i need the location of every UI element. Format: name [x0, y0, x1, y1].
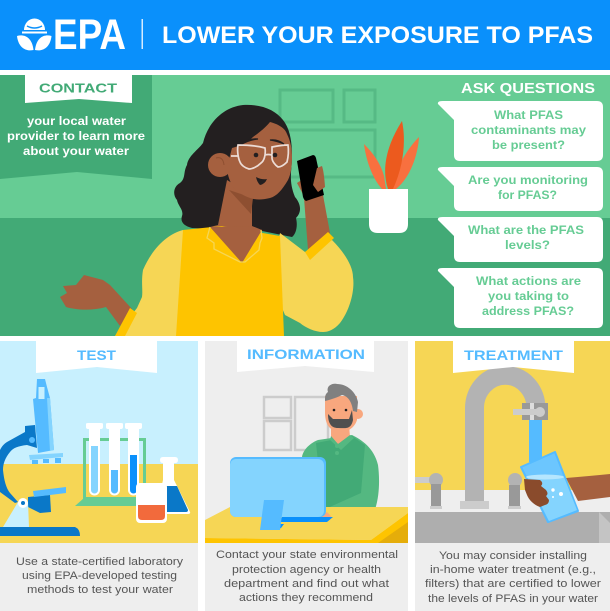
- question bubble 1: contaminants may: [471, 123, 586, 137]
- sink: [415, 512, 610, 543]
- face: [227, 122, 292, 200]
- treatment caption: filters) that are certified to lower: [425, 578, 601, 590]
- question bubble 2: for PFAS?: [498, 188, 557, 202]
- title: LOWER YOUR EXPOSURE TO PFAS: [162, 22, 593, 49]
- contact text: about your water: [23, 144, 129, 158]
- question bubble 1: What PFAS: [494, 108, 563, 122]
- eyebrows: [240, 139, 284, 145]
- information caption: [216, 549, 398, 604]
- arm: [566, 474, 610, 501]
- glass of water: [521, 452, 578, 522]
- icon: EPA logo flower: [17, 19, 52, 50]
- test tube rack: [75, 423, 152, 506]
- treatment caption: [425, 550, 601, 605]
- contact banner: [0, 75, 152, 179]
- left arm and hand: [60, 275, 132, 326]
- question bubble 4: you taking to: [488, 289, 569, 303]
- right arm: [304, 195, 330, 250]
- test caption: using EPA-developed testing: [22, 570, 177, 582]
- information ribbon: [237, 341, 374, 372]
- sleeves: [115, 230, 200, 336]
- question bubble 3: What are the PFAS: [468, 223, 584, 237]
- information caption: actions they recommend: [239, 592, 373, 604]
- panel: contact scene: [0, 75, 610, 336]
- wall windows: [264, 397, 328, 450]
- panel: test: [0, 341, 198, 611]
- woman: [60, 105, 353, 336]
- question bubble 4: [438, 268, 603, 328]
- cuffs: [305, 232, 334, 260]
- microscope: [0, 379, 80, 536]
- treatment caption: the levels of PFAS in your water: [428, 593, 598, 605]
- plant: [364, 121, 419, 233]
- question bubble 4: address PFAS?: [482, 304, 574, 318]
- test heading: TEST: [77, 347, 116, 363]
- wall frames: [280, 90, 375, 177]
- faucet: [460, 375, 548, 509]
- faucet handles: [415, 473, 522, 509]
- water stream: [529, 420, 542, 462]
- treatment caption: in-home water treatment (e.g.,: [430, 564, 596, 576]
- information heading: INFORMATION: [247, 346, 365, 362]
- test caption: methods to test your water: [27, 584, 173, 596]
- panel: information: [205, 341, 408, 611]
- information caption: Contact your state environmental: [216, 549, 398, 561]
- neck: [210, 180, 262, 262]
- treatment heading: TREATMENT: [464, 347, 564, 363]
- contact text: your local water: [27, 114, 126, 128]
- contact text: provider to learn more: [7, 129, 145, 143]
- vest: [176, 226, 284, 336]
- question bubble 4: What actions are: [476, 274, 581, 288]
- treatment caption: You may consider installing: [439, 550, 587, 562]
- phone fingers: [313, 166, 325, 192]
- glasses: [231, 145, 288, 169]
- beaker: [136, 483, 167, 523]
- test caption: Use a state-certified laboratory: [16, 556, 184, 568]
- EPA wordmark: EPA: [53, 11, 126, 59]
- question bubble 1: be present?: [492, 138, 565, 152]
- question bubble 2: Are you monitoring: [468, 173, 588, 187]
- keyboard and hand: [276, 512, 333, 530]
- contact heading: CONTACT: [39, 80, 117, 96]
- question bubble 3: [438, 217, 603, 262]
- header band: [0, 0, 610, 70]
- neck V opening: [210, 226, 262, 263]
- computer monitor: [230, 457, 326, 530]
- panel: treatment: [415, 341, 610, 611]
- information caption: department and find out what: [224, 578, 389, 590]
- hand holding glass: [524, 479, 549, 507]
- ask questions heading: ASK QUESTIONS: [461, 81, 595, 97]
- hair: [174, 105, 300, 237]
- hand behind phone: [297, 179, 306, 200]
- mouth: [256, 177, 267, 185]
- contact text: [7, 114, 145, 158]
- test caption: [16, 556, 184, 596]
- question bubble 3: levels?: [505, 238, 550, 252]
- treatment ribbon: [453, 341, 574, 373]
- phone: [297, 155, 324, 201]
- question bubble 1: [438, 101, 603, 161]
- test ribbon: [36, 341, 157, 373]
- man: [300, 384, 379, 520]
- question bubble 2: [438, 167, 603, 211]
- flask: [155, 457, 190, 514]
- collar: [207, 227, 262, 262]
- desk: [205, 507, 408, 543]
- information caption: protection agency or health: [232, 564, 381, 576]
